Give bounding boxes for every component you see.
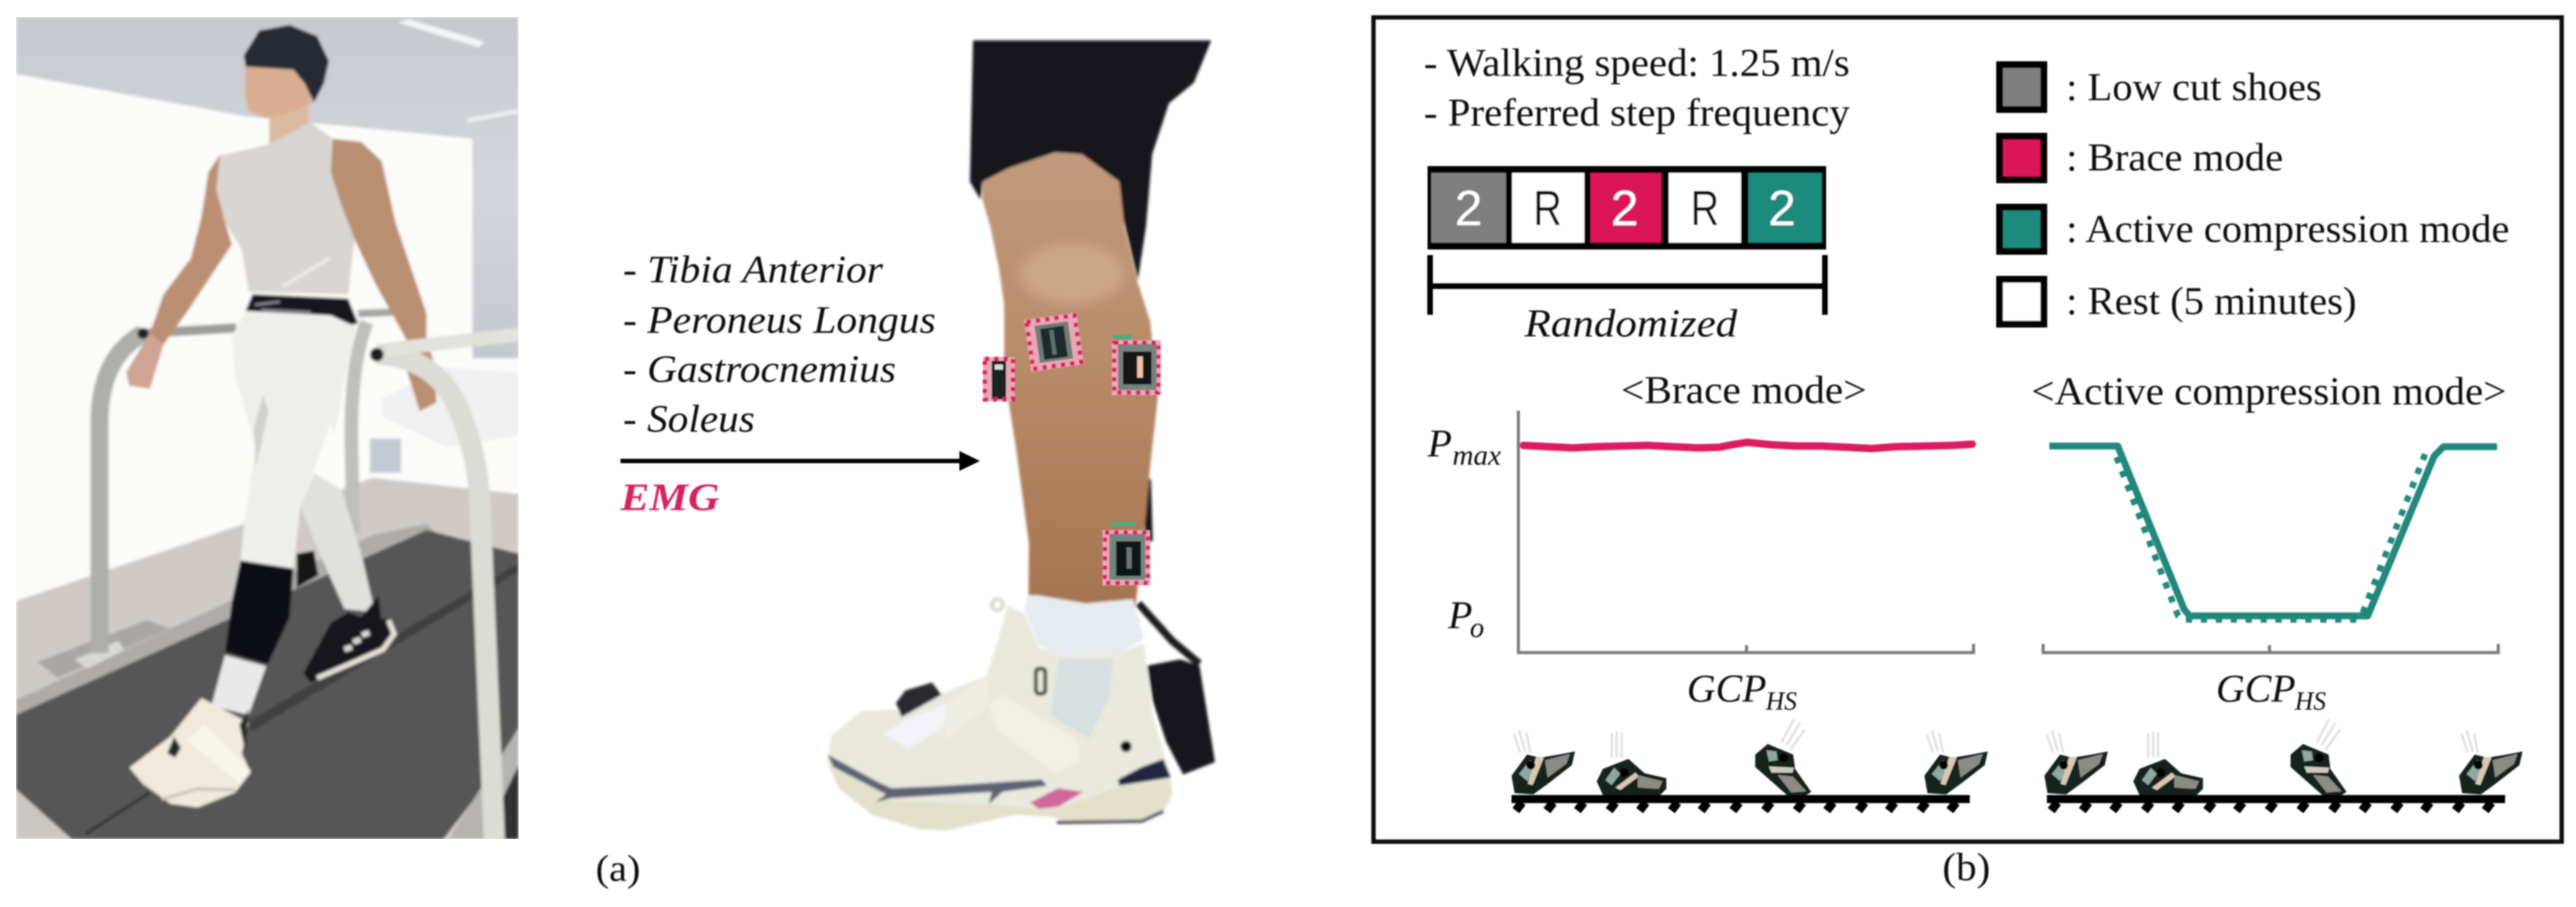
dotted reference along curve (2117, 447, 2428, 620)
rear shoe (303, 595, 395, 682)
left arm (149, 154, 234, 346)
EMG sensor 3 (1112, 337, 1161, 395)
cell: rest: R (1533, 180, 1562, 236)
upper pants (232, 312, 356, 569)
cell: low cut shoes 2 min: 2 (1455, 180, 1482, 236)
front shoe (129, 698, 251, 807)
y label Pmax: P (1427, 421, 1452, 465)
shoe: next heel strike (2459, 730, 2523, 794)
muscle list: - Tibia Anterior (623, 249, 884, 291)
rear handrail (358, 312, 392, 314)
cable behind calf (1147, 479, 1149, 541)
strap behind knee (297, 551, 318, 588)
rear leg (300, 473, 375, 612)
muscle list: - Soleus (623, 398, 755, 440)
shoe: next heel strike (1924, 730, 1988, 794)
ceiling (16, 17, 519, 358)
panel b frame (1373, 17, 2562, 842)
y label Pmax (1427, 421, 1502, 471)
hair (244, 25, 329, 103)
photo background wall (139, 138, 433, 383)
shoe: toe off (1755, 719, 1811, 795)
shoe module (896, 682, 941, 717)
right arm (331, 139, 436, 411)
walking conditions text: - Walking speed: 1.25 m/s (1424, 40, 1850, 85)
shoe D-ring (1036, 669, 1045, 694)
base plate (37, 620, 170, 678)
active compression pressure curve (2049, 446, 2497, 616)
y label Po (1447, 593, 1484, 643)
caption (b): (b) (1942, 845, 1990, 889)
shoe upper (828, 605, 1172, 830)
cell: rest (1669, 173, 1741, 243)
x label GCP HS: GCP (1687, 666, 1766, 710)
shoe: toe off (2291, 719, 2347, 795)
cell: low cut shoes 2 min (1431, 173, 1506, 243)
shoe navy heel (1118, 759, 1171, 786)
ground (2047, 795, 2505, 811)
lower leg (211, 655, 266, 715)
shoe: heel strike (1512, 730, 1575, 794)
face (245, 65, 312, 118)
desk and items behind (382, 367, 519, 448)
tank top (216, 122, 354, 294)
y label Po: P (1447, 593, 1472, 637)
ankle control unit (1147, 659, 1215, 774)
walking conditions text: - Preferred step frequency (1424, 90, 1850, 134)
cell: brace mode 2 min (1590, 173, 1661, 243)
cell: brace mode 2 min: 2 (1611, 180, 1638, 236)
x label GCP HS: HS (2294, 687, 2326, 716)
cell: active compression 2 min (1748, 173, 1822, 243)
knee sleeve (225, 560, 293, 664)
treadmill side rail (16, 524, 435, 719)
muscle list (623, 249, 936, 440)
calf (982, 152, 1158, 607)
ground (1512, 795, 1970, 811)
cell: rest: R (1691, 180, 1719, 236)
legend: brace mode: : Brace mode (2066, 135, 2283, 179)
cell: rest (1512, 173, 1584, 243)
shoe ankle strap (989, 695, 1080, 773)
belt (246, 294, 358, 325)
right handrail (377, 354, 494, 839)
floor (16, 478, 519, 839)
photo: lower leg with EMG sensors and shoe (828, 40, 1215, 830)
photo: participant walking on treadmill (16, 17, 519, 839)
treadmill right frame (449, 728, 519, 839)
axes (1518, 411, 1974, 653)
chart: brace mode (1427, 368, 1974, 716)
neck (269, 103, 308, 144)
shoe: heel strike (2044, 730, 2108, 794)
y label Po: o (1470, 612, 1484, 643)
arrow to leg (621, 451, 980, 471)
brace pressure line (1523, 442, 1972, 449)
caption (a): (a) (596, 848, 640, 889)
cell: active compression 2 min: 2 (1768, 180, 1796, 236)
EMG sensor 1 (983, 357, 1015, 401)
shoe toe strap (884, 703, 947, 748)
gait illustration: active compression mode (2044, 719, 2523, 811)
sock (1025, 595, 1144, 658)
axis (2043, 644, 2498, 653)
chart title: brace mode: <Brace mode> (1621, 368, 1867, 412)
legend: low cut shoes: : Low cut shoes (2066, 65, 2322, 109)
legend (2000, 65, 2509, 324)
x label GCP HS (2216, 666, 2326, 716)
x label GCP HS (1687, 666, 1797, 716)
EMG sensor 4 (1102, 524, 1150, 585)
shoe: foot flat (1597, 732, 1666, 795)
randomized label: Randomized (1524, 301, 1738, 345)
shoe blue band (828, 755, 1047, 804)
shoe sole (828, 763, 1172, 830)
legend: rest: : Rest (5 minutes) (2066, 279, 2357, 323)
shoe: foot flat (2133, 732, 2203, 795)
muscle list: - Gastrocnemius (623, 348, 896, 391)
legend: active compression mode: : Active compression mode (2066, 207, 2509, 251)
gait illustration: brace mode (1512, 719, 1988, 811)
y label Pmax: max (1452, 439, 1502, 471)
shorts (970, 40, 1211, 280)
EMG label: EMG (620, 477, 719, 519)
shoe blue tongue (1051, 659, 1114, 738)
chart: active compression mode (2031, 369, 2506, 716)
chart title: active compression mode: <Active compression mode> (2031, 369, 2506, 413)
shoe pink accent (1030, 788, 1083, 809)
x label GCP HS: GCP (2216, 666, 2296, 710)
muscle list: - Peroneus Longus (623, 299, 936, 342)
corner floor (16, 789, 72, 839)
treadmill belt (16, 530, 519, 839)
x label GCP HS: HS (1765, 687, 1797, 716)
randomized protocol sequence bar (1428, 166, 1826, 249)
randomized bracket (1430, 255, 1825, 315)
EMG sensor 2 (1024, 312, 1084, 372)
walking conditions text (1424, 40, 1850, 134)
left handrail (99, 333, 143, 653)
cable from calf (1138, 603, 1199, 664)
